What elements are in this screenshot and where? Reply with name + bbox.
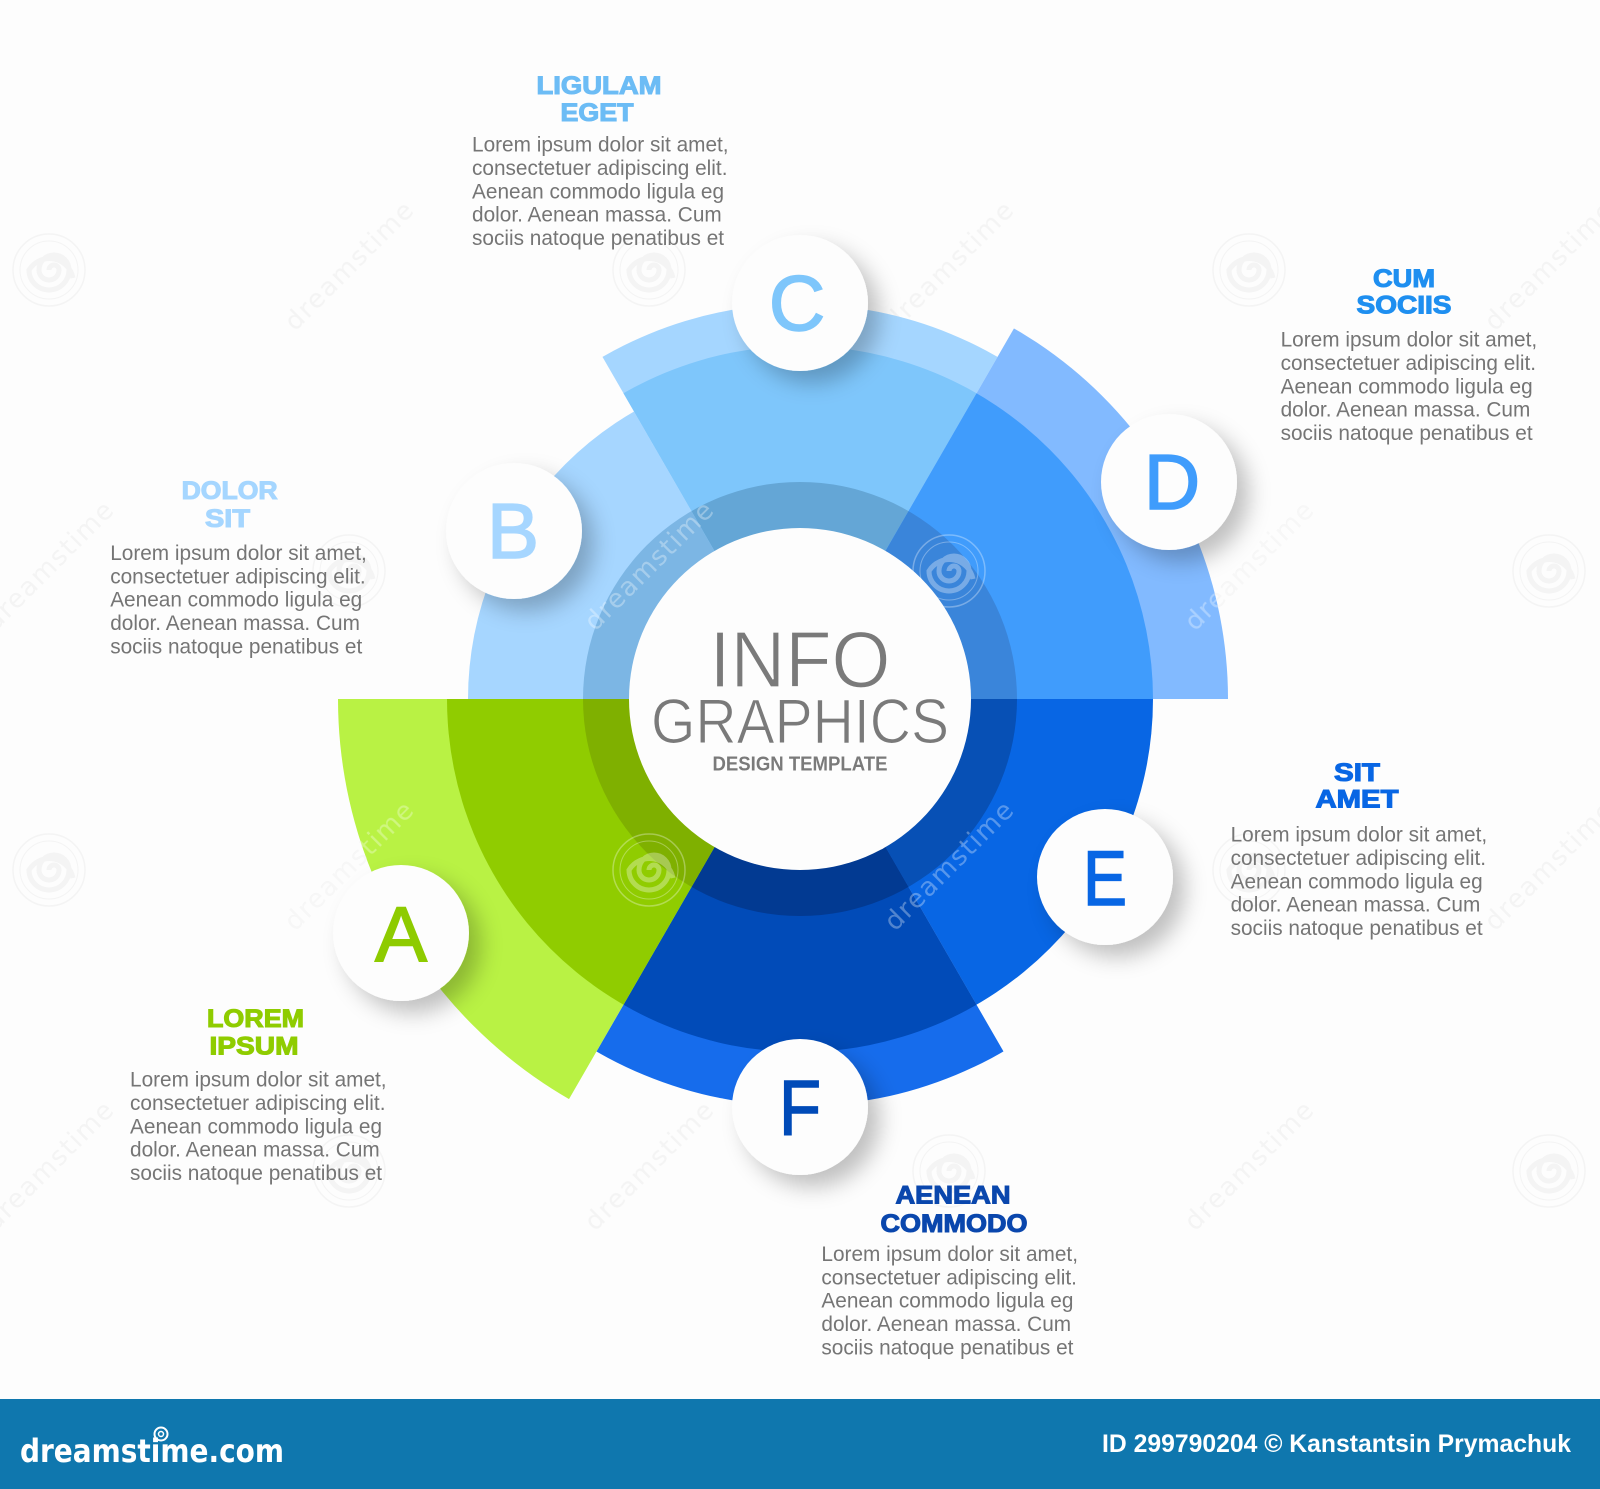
- text block D: Cum Sociis: consectetuer adipiscing elit.: [1281, 352, 1536, 375]
- badge D: D: [1144, 438, 1200, 526]
- text block F: Aenean Commodo: sociis natoque penatibus et: [821, 1336, 1074, 1359]
- watermark layer on white: dreamstime: [279, 195, 421, 337]
- text block D: Cum Sociis: dolor. Aenean massa. Cum: [1281, 399, 1530, 422]
- text block C: Ligulam Eget: Aenean commodo ligula eg: [472, 180, 724, 203]
- text block E: Sit Amet: Lorem ipsum dolor sit amet,: [1231, 824, 1487, 847]
- text block B: Dolor Sit: sociis natoque penatibus et: [110, 635, 362, 658]
- segment C: [602, 310, 998, 551]
- segment F: [596, 847, 1004, 1100]
- centre title: GRAPHICS: GRAPHICS: [651, 687, 949, 757]
- text block B: Dolor Sit: dolor. Aenean massa. Cum: [110, 612, 360, 635]
- segment E: [886, 699, 1153, 1005]
- watermark layer on chart: dreamstime: [279, 795, 421, 937]
- footer logo: dreamstime.com: [20, 1432, 284, 1470]
- segment D: [886, 328, 1228, 699]
- watermark layer on white: dreamstime: [879, 195, 1021, 337]
- text block C: Ligulam Eget: EGET: [560, 99, 634, 127]
- text block A: Lorem Ipsum: sociis natoque penatibus et: [130, 1162, 382, 1185]
- centre title: INFO: INFO: [710, 615, 890, 704]
- text block A: Lorem Ipsum: [130, 1005, 387, 1185]
- badge E: E: [1083, 834, 1127, 922]
- text block E: Sit Amet: Aenean commodo ligula eg: [1231, 870, 1483, 893]
- text block B: Dolor Sit: Aenean commodo ligula eg: [110, 589, 362, 612]
- text block D: Cum Sociis: Lorem ipsum dolor sit amet,: [1281, 329, 1537, 352]
- text block D: Cum Sociis: sociis natoque penatibus et: [1281, 422, 1533, 445]
- badge C: C: [769, 259, 825, 347]
- watermark layer on white: dreamstime: [1179, 1095, 1321, 1237]
- text block C: Ligulam Eget: consectetuer adipiscing elit.: [472, 157, 727, 180]
- text block A: Lorem Ipsum: Lorem ipsum dolor sit amet,: [130, 1069, 387, 1092]
- text block E: Sit Amet: consectetuer adipiscing elit.: [1231, 847, 1486, 870]
- text block A: Lorem Ipsum: IPSUM: [210, 1032, 298, 1060]
- watermark layer on chart: [279, 495, 1321, 937]
- text block E: Sit Amet: SIT: [1334, 759, 1380, 787]
- watermark layer on white: dreamstime: [579, 1095, 721, 1237]
- badge C: [732, 235, 868, 371]
- text block A: Lorem Ipsum: LOREM: [207, 1005, 304, 1033]
- badge B: B: [487, 487, 539, 575]
- text block F: Aenean Commodo: consectetuer adipiscing elit.: [821, 1266, 1077, 1289]
- badge D: [1101, 414, 1237, 550]
- badge A: [333, 865, 469, 1001]
- text block D: Cum Sociis: SOCIIS: [1356, 292, 1452, 320]
- centre subtitle: DESIGN TEMPLATE: [712, 754, 888, 776]
- text block C: Ligulam Eget: Lorem ipsum dolor sit amet,: [472, 134, 729, 157]
- text block B: Dolor Sit: SIT: [205, 505, 250, 533]
- text block B: Dolor Sit: [110, 477, 367, 658]
- watermark layer on white: [0, 195, 1600, 1237]
- text block F: Aenean Commodo: dolor. Aenean massa. Cum: [821, 1313, 1071, 1336]
- badge A: A: [375, 890, 427, 978]
- text block E: Sit Amet: dolor. Aenean massa. Cum: [1231, 894, 1480, 917]
- text block E: Sit Amet: sociis natoque penatibus et: [1231, 917, 1483, 940]
- badge F: [732, 1039, 868, 1175]
- text block C: Ligulam Eget: sociis natoque penatibus et: [472, 227, 724, 250]
- text block C: Ligulam Eget: dolor. Aenean massa. Cum: [472, 204, 722, 227]
- donut chart: [338, 310, 1228, 1100]
- text block F: Aenean Commodo: AENEAN: [896, 1181, 1010, 1209]
- text block B: Dolor Sit: consectetuer adipiscing elit.: [110, 565, 366, 588]
- footer bar: [0, 1399, 1600, 1489]
- watermark layer on chart: dreamstime: [1179, 495, 1321, 637]
- segment A: [338, 699, 714, 1099]
- text block A: Lorem Ipsum: dolor. Aenean massa. Cum: [130, 1139, 380, 1162]
- text block A: Lorem Ipsum: consectetuer adipiscing elit.: [130, 1092, 385, 1115]
- watermark layer on chart: dreamstime: [879, 795, 1021, 937]
- text block C: Ligulam Eget: LIGULAM: [536, 72, 662, 100]
- text block E: Sit Amet: AMET: [1316, 785, 1398, 813]
- text block B: Dolor Sit: DOLOR: [182, 477, 278, 505]
- text block D: Cum Sociis: CUM: [1373, 265, 1435, 293]
- text block B: Dolor Sit: Lorem ipsum dolor sit amet,: [110, 542, 367, 565]
- footer credit: ID 299790204 © Kanstantsin Prymachuk: [1102, 1430, 1571, 1458]
- text block C: Ligulam Eget: [472, 72, 729, 250]
- segment B: [468, 412, 714, 699]
- text block A: Lorem Ipsum: Aenean commodo ligula eg: [130, 1115, 382, 1138]
- watermark layer on chart: dreamstime: [579, 495, 721, 637]
- text block E: Sit Amet: [1231, 759, 1487, 940]
- text block D: Cum Sociis: Aenean commodo ligula eg: [1281, 375, 1533, 398]
- text block F: Aenean Commodo: COMMODO: [880, 1210, 1028, 1238]
- badge B: [446, 463, 582, 599]
- text block F: Aenean Commodo: Lorem ipsum dolor sit amet,: [821, 1243, 1078, 1266]
- badge F: F: [779, 1064, 821, 1152]
- badge E: [1037, 809, 1173, 945]
- text block F: Aenean Commodo: [821, 1181, 1078, 1359]
- watermark layer on white: dreamstime: [279, 795, 421, 937]
- watermark layer on white: dreamstime: [1179, 495, 1321, 637]
- text block F: Aenean Commodo: Aenean commodo ligula eg: [821, 1290, 1073, 1313]
- centre circle: [629, 528, 971, 870]
- text block D: Cum Sociis: [1281, 265, 1537, 445]
